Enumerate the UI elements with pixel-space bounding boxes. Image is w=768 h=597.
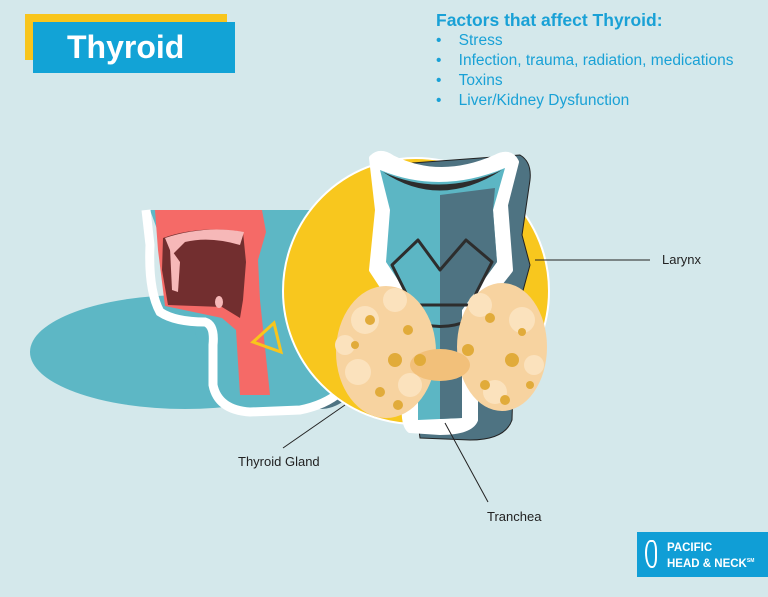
factors text block: • Liver/Kidney Dysfunction <box>436 92 629 109</box>
label: Larynx: Larynx <box>662 252 701 267</box>
factors text block: • Stress <box>436 32 503 49</box>
logo: PACIFIC <box>667 542 712 554</box>
label: Tranchea: Tranchea <box>487 509 541 524</box>
title <box>25 14 235 73</box>
factors text block <box>436 10 734 109</box>
label: Thyroid Gland: Thyroid Gland <box>238 454 320 469</box>
leader lines <box>283 260 650 502</box>
logo: HEAD & NECKSM <box>667 558 754 570</box>
yellow circle <box>283 158 549 424</box>
thyroid gland lobes <box>335 283 547 418</box>
title: Thyroid <box>67 29 184 65</box>
larynx <box>372 154 530 440</box>
factors text block: • Toxins <box>436 72 503 89</box>
logo <box>637 532 768 577</box>
factors text block: Factors that affect Thyroid: <box>436 10 663 30</box>
neck side view <box>30 210 345 412</box>
factors text block: • Infection, trauma, radiation, medications <box>436 52 734 69</box>
